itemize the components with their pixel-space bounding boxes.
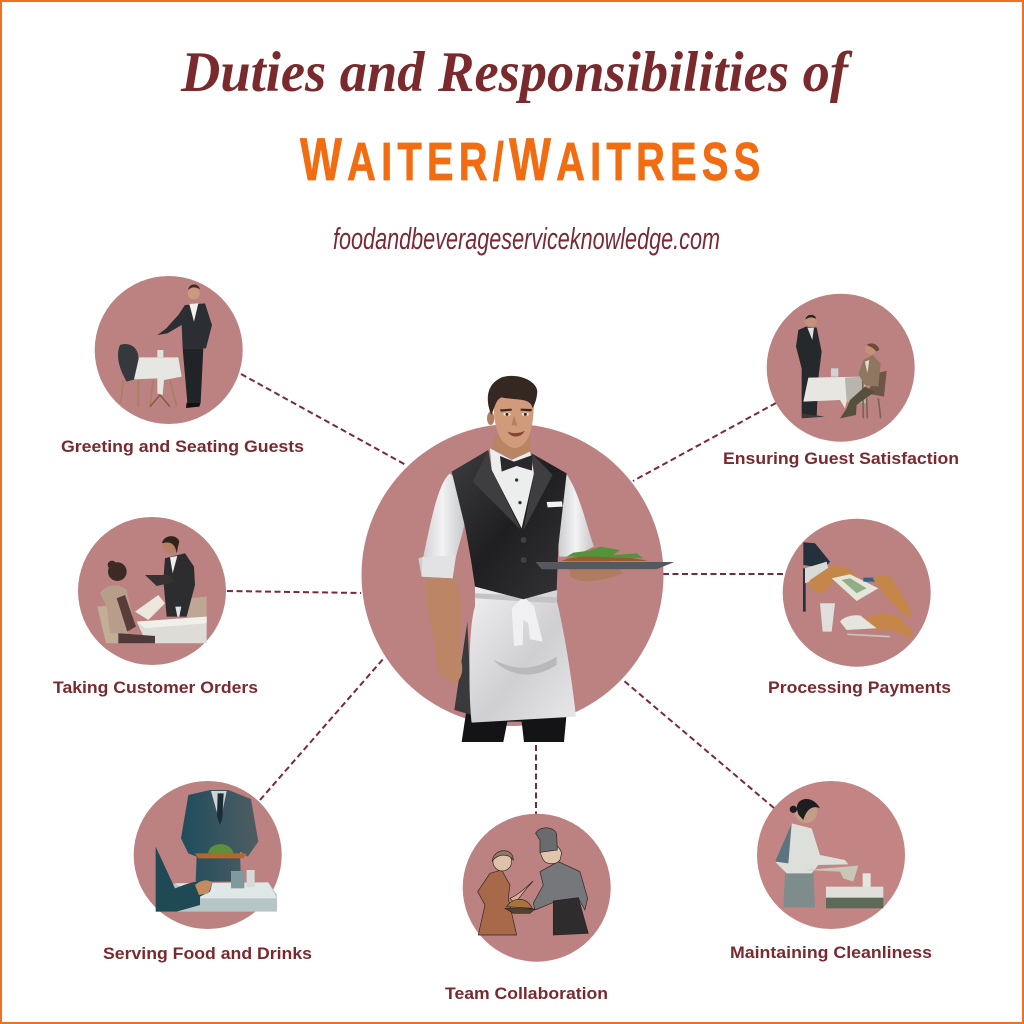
circle (767, 294, 915, 442)
connector: team (535, 745, 537, 814)
connector: guest satisfaction (633, 403, 776, 481)
connector: greeting (241, 374, 406, 465)
circle (78, 517, 226, 665)
icon: waiter checking on guest (796, 315, 887, 418)
waiter figure (418, 376, 674, 742)
connector: taking orders (227, 591, 361, 593)
item: ensuring guest satisfaction (723, 294, 959, 468)
website url: foodandbeverageserviceknowledge.com (333, 221, 720, 256)
label: Team Collaboration (445, 984, 608, 1003)
item: serving food and drinks (103, 781, 312, 963)
icon: hands exchanging money (803, 542, 912, 638)
circle (95, 276, 243, 424)
icon: waiter gesturing to table (118, 284, 212, 408)
label: Greeting and Seating Guests (61, 437, 304, 456)
item: taking customer orders (53, 517, 258, 697)
central circle (362, 424, 664, 726)
item: team collaboration (445, 814, 611, 1003)
connector: payments (663, 573, 785, 575)
icon: server and chef with cloche (478, 828, 588, 935)
central waiter illustration (362, 376, 674, 742)
label: Ensuring Guest Satisfaction (723, 449, 959, 468)
label: Processing Payments (768, 678, 951, 697)
label: Maintaining Cleanliness (730, 943, 932, 962)
icon: server cleaning table (775, 799, 883, 908)
icon: waiter taking order from seated guest (97, 536, 207, 643)
label: Taking Customer Orders (53, 678, 258, 697)
icon: waiter serving plate (156, 790, 277, 912)
circle (783, 519, 931, 667)
item: maintaining cleanliness (730, 781, 932, 962)
title: duties and responsibilities of: Duties and Responsibilities of (180, 41, 853, 104)
circle (134, 781, 282, 929)
item: processing payments (768, 519, 951, 697)
connector: cleanliness (623, 680, 774, 808)
circle (757, 781, 905, 929)
label: Serving Food and Drinks (103, 944, 312, 963)
heading: waiter/waitress: WAITER/WAITRESS (300, 127, 760, 194)
connector: serving (260, 658, 384, 800)
item: greeting and seating guests (61, 276, 304, 456)
circle (463, 814, 611, 962)
